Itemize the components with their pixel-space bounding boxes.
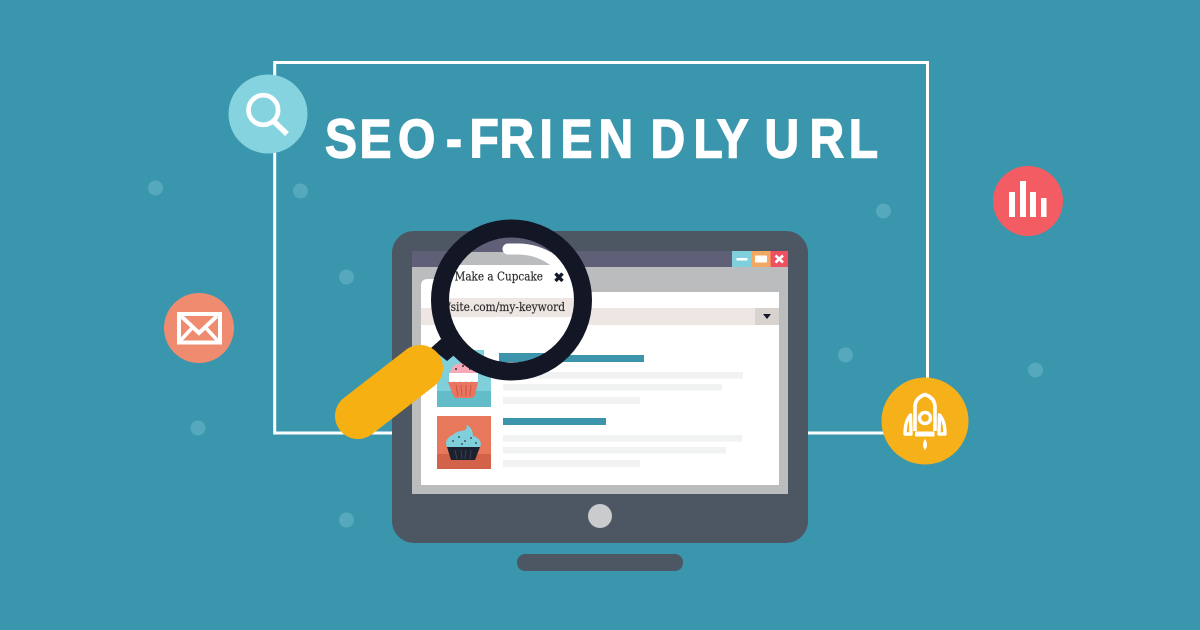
monitor bezel [392, 231, 808, 543]
icon: bar chart circle [993, 166, 1063, 236]
handle connector [431, 339, 458, 361]
result text lines 2 [503, 435, 742, 467]
decorative background dots [148, 180, 1043, 528]
magnified address bar [449, 298, 574, 317]
magnified heading bar [499, 353, 544, 362]
magnified url text: /site.com/my-keyword [447, 300, 565, 314]
browser title bar [412, 251, 788, 267]
title: SEO-FRIENDLY URL [325, 109, 878, 169]
icon: search circle [228, 74, 308, 154]
magnifying glass [358, 228, 585, 416]
lens ring [440, 228, 583, 372]
magnified tab title: o Make a Cupcake [445, 270, 543, 284]
yellow handle [358, 368, 420, 416]
monitor [392, 231, 808, 571]
magnified close icon [556, 274, 562, 281]
icon: rocket circle [882, 378, 968, 464]
icon: mail circle [164, 293, 234, 363]
window buttons [732, 251, 788, 267]
cupcake thumbnail 1 [437, 350, 491, 407]
cupcake thumbnail 2 [437, 416, 491, 469]
search result 1 [437, 350, 743, 407]
browser page [421, 279, 779, 485]
result text lines 1 [503, 372, 743, 404]
dropdown button [755, 308, 779, 325]
result heading bar 2 [503, 418, 606, 425]
power button [588, 504, 612, 528]
screen background [412, 251, 788, 494]
monitor stand [517, 554, 683, 571]
lens contents: magnified browser [449, 238, 574, 359]
search result 2 [437, 416, 742, 469]
white title frame [275, 62, 928, 433]
result heading bar 1 [499, 355, 644, 362]
address bar [421, 308, 779, 325]
